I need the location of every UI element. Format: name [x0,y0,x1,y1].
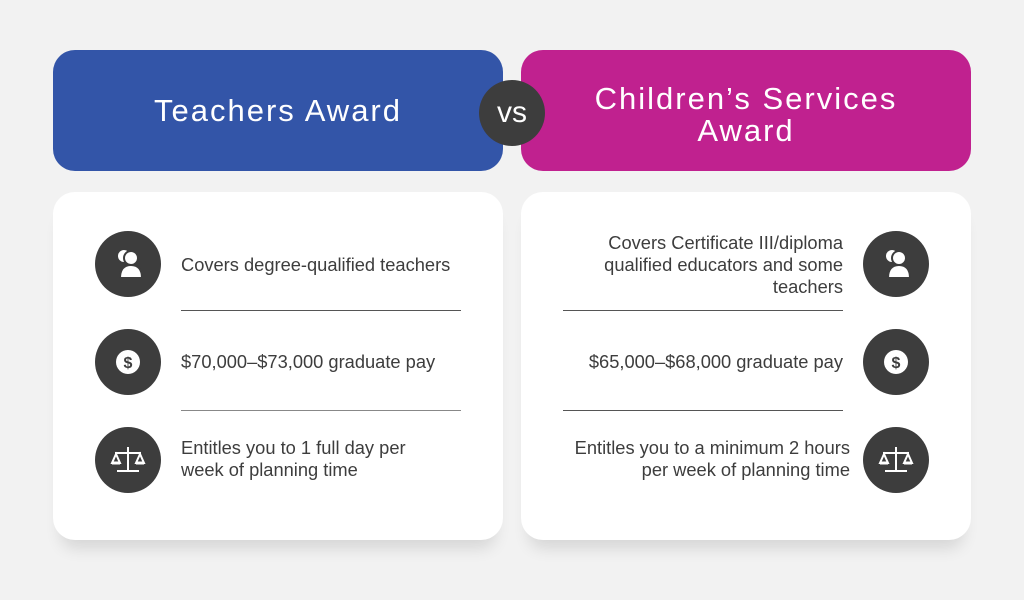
vs badge [479,80,545,146]
vs badge: vs [497,96,527,129]
text: planning: week of planning time [181,459,358,480]
header: Teachers Award: Teachers Award [154,92,402,128]
text: covers: Covers Certificate III/diploma [608,232,843,253]
header: Children's Services Award [521,50,971,171]
text: covers: qualified educators and some [604,254,843,275]
text: planning [181,437,406,480]
icon: dollar [863,329,929,395]
text: covers: teachers [773,276,843,297]
text: planning [575,437,850,480]
icon: dollar: $ [892,355,901,372]
panel: teachers award [53,192,503,540]
icon: scales [95,427,161,493]
text: pay: $70,000–$73,000 graduate pay [181,351,435,372]
text: covers: Covers degree-qualified teachers [181,254,450,275]
icon: people [95,231,161,297]
icon: people [863,231,929,297]
icon: dollar [95,329,161,395]
text: planning: Entitles you to 1 full day per [181,437,406,458]
icon: scales [863,427,929,493]
icon: dollar: $ [124,355,133,372]
header: Children's Services Award: Award [697,112,795,148]
panel: children's services award [521,192,971,540]
header: Teachers Award [53,50,503,171]
text: planning: Entitles you to a minimum 2 hours [575,437,850,458]
header: Children's Services Award: Children’s Services [595,80,897,116]
text: covers [604,232,844,297]
text: planning: per week of planning time [642,459,850,480]
text: pay: $65,000–$68,000 graduate pay [589,351,843,372]
